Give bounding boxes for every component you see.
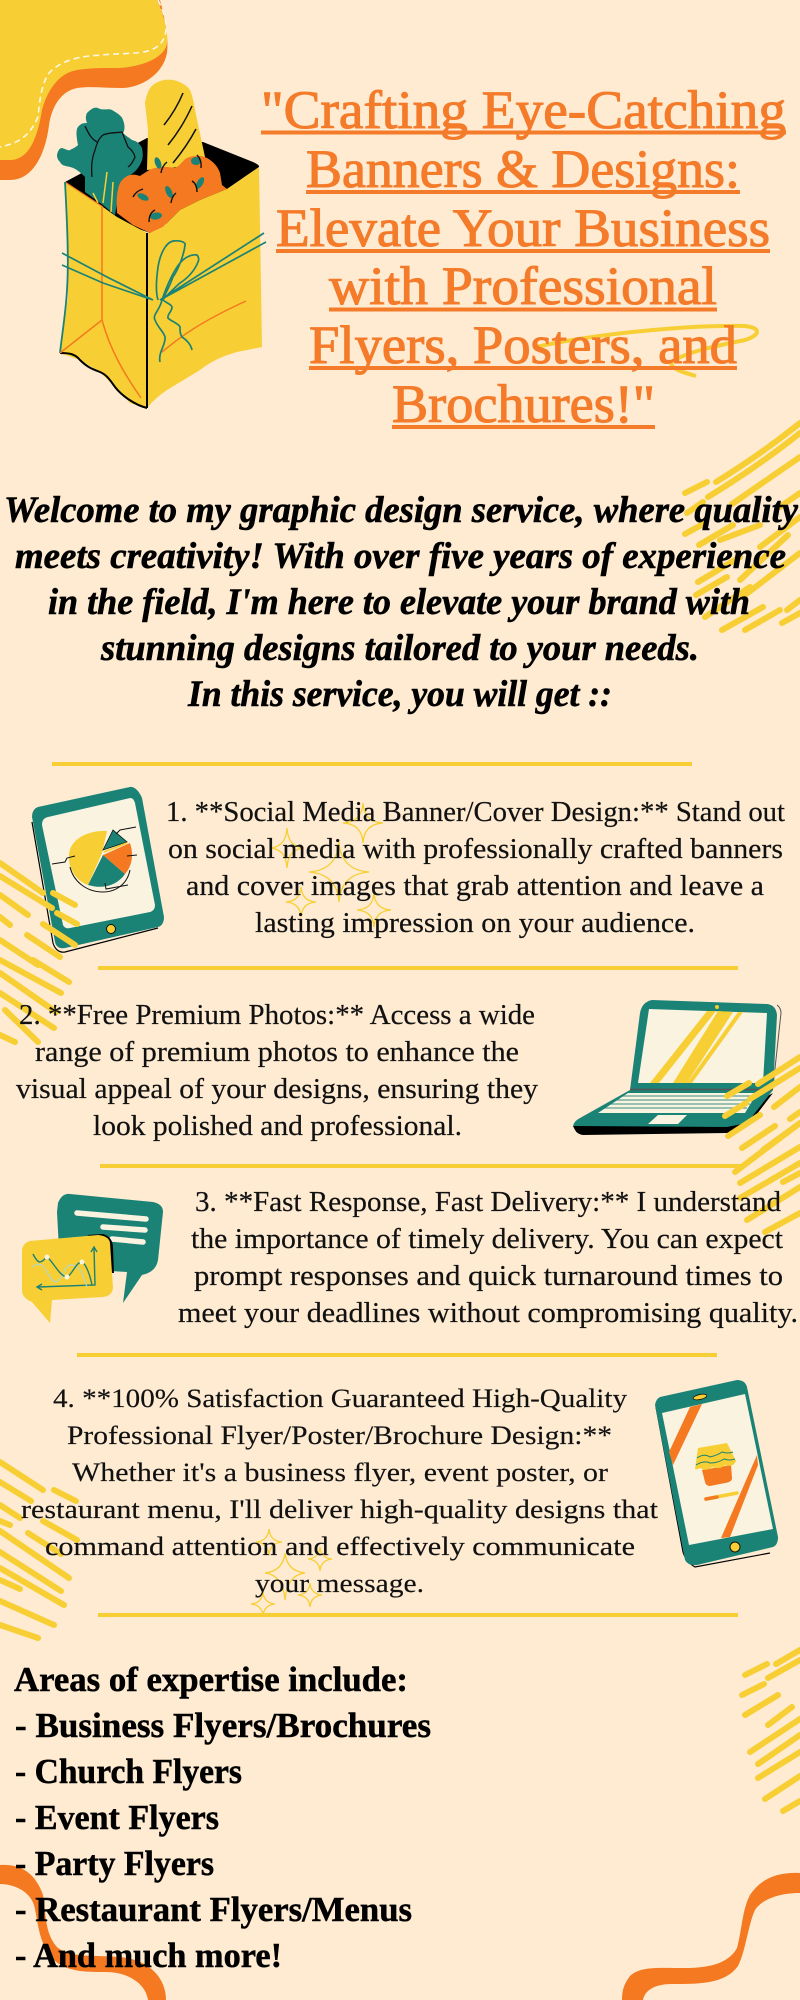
icon: chat bubbles [22, 1194, 163, 1323]
icon: smartphone [655, 1380, 778, 1567]
item one text: and cover images that grab attention and leave a [186, 871, 765, 902]
areas of expertise list: - Business Flyers/Brochures [15, 1706, 431, 1745]
item three text: meet your deadlines without compromising quality. [178, 1298, 798, 1329]
areas of expertise list: - Restaurant Flyers/Menus [15, 1890, 412, 1929]
decorative ribbon: bottom left [0, 1865, 166, 2000]
item four text: command attention and effectively communicate [45, 1531, 635, 1561]
areas of expertise list: - And much more! [15, 1936, 282, 1975]
item two text [16, 1000, 538, 1142]
decorative sparkles: item one [270, 803, 391, 927]
intro text: stunning designs tailored to your needs. [100, 628, 699, 669]
title [261, 80, 786, 434]
intro text: in the field, I'm here to elevate your brand with [48, 582, 750, 623]
icon: laptop [573, 1000, 781, 1135]
areas of expertise list [14, 1660, 431, 1975]
item two text: look polished and professional. [93, 1111, 462, 1142]
areas of expertise list: - Party Flyers [15, 1844, 214, 1883]
item one text [166, 797, 785, 939]
decorative stripes: left middle [0, 863, 77, 1042]
decorative blob: top-left corner wave [0, 0, 167, 180]
item two text: 2. **Free Premium Photos:** Access a wide [19, 1000, 535, 1031]
title: Flyers, Posters, and [309, 315, 737, 375]
item three text: prompt responses and quick turnaround times to [194, 1261, 783, 1292]
decorative stripes: lower left [0, 1462, 77, 1638]
intro text: Welcome to my graphic design service, where quality [4, 490, 799, 531]
item four text: your message. [255, 1568, 424, 1598]
item two text: visual appeal of your designs, ensuring they [16, 1074, 538, 1105]
item three text: 3. **Fast Response, Fast Delivery:** I understand [195, 1187, 781, 1218]
title: Brochures!" [392, 374, 655, 434]
intro text: meets creativity! With over five years of experience [15, 536, 786, 577]
areas of expertise list: - Event Flyers [15, 1798, 219, 1837]
item three text: the importance of timely delivery. You can expect [191, 1224, 783, 1255]
decorative stripes: lower right [742, 1650, 800, 1811]
item one text: on social media with professionally crafted banners [168, 834, 783, 865]
item four text: Professional Flyer/Poster/Brochure Design:** [67, 1420, 612, 1450]
intro text: In this service, you will get :: [187, 674, 612, 715]
intro text [4, 490, 799, 715]
title: "Crafting Eye-Catching [261, 80, 786, 140]
decorative stripes: upper right [685, 423, 800, 630]
item four text [21, 1383, 659, 1598]
item one text: lasting impression on your audience. [255, 908, 695, 939]
areas of expertise list: - Church Flyers [15, 1752, 242, 1791]
item four text: Whether it's a business flyer, event poster, or [72, 1457, 608, 1487]
title: Banners & Designs: [306, 139, 740, 199]
title: Elevate Your Business [276, 198, 770, 258]
item four text: restaurant menu, I'll deliver high-quality designs that [21, 1494, 659, 1524]
item two text: range of premium photos to enhance the [35, 1037, 519, 1068]
decorative ribbon: bottom right [622, 1873, 800, 2000]
item three text [178, 1187, 798, 1329]
item one text: 1. **Social Media Banner/Cover Design:** Stand out [166, 797, 785, 828]
icon: grocery bag [57, 80, 266, 408]
icon: tablet with pie chart [32, 787, 164, 952]
item four text: 4. **100% Satisfaction Guaranteed High-Quality [53, 1383, 628, 1413]
title: with Professional [329, 256, 717, 316]
decorative stripes: right middle [725, 1057, 800, 1232]
decorative sparkles: item four [251, 1529, 332, 1616]
areas of expertise list: Areas of expertise include: [14, 1660, 408, 1699]
